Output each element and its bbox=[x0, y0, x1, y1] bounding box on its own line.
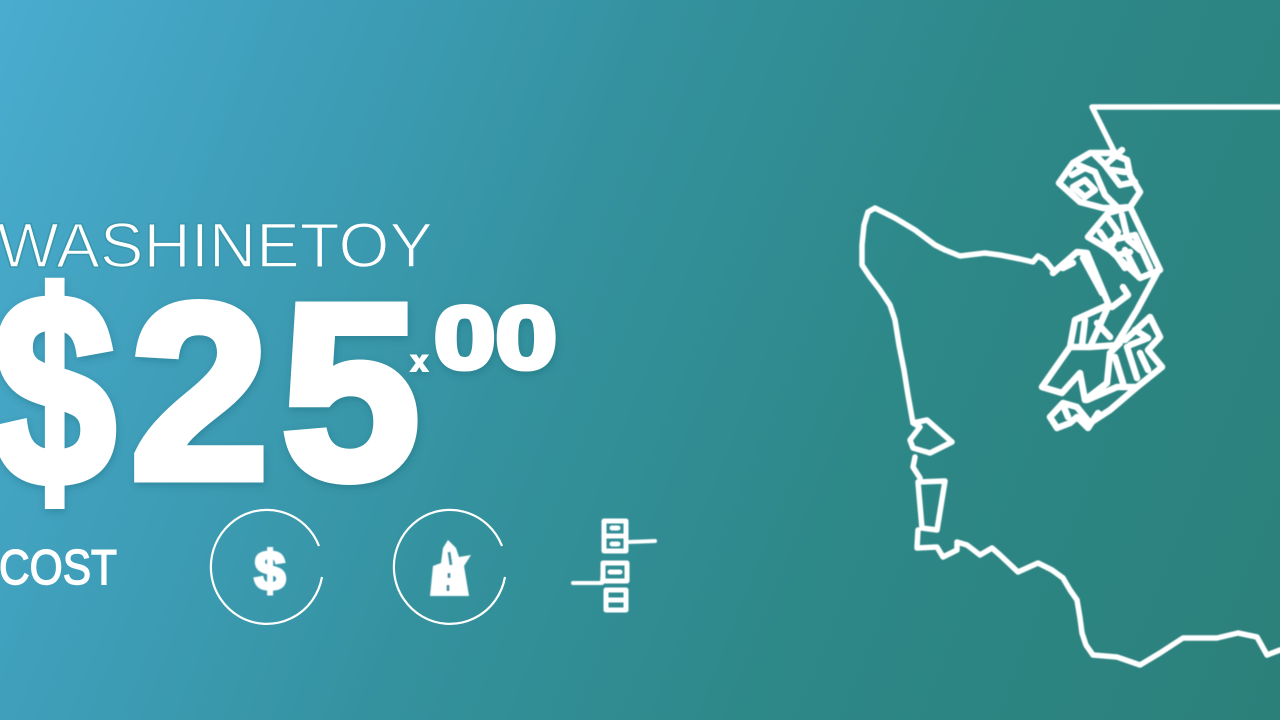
big price figure bbox=[0, 239, 557, 542]
Pacific coast and southern border bbox=[862, 208, 1280, 665]
circle ring bbox=[211, 510, 322, 624]
top glyph bbox=[604, 521, 626, 551]
middle glyph bbox=[603, 563, 627, 581]
Puget Sound: inlet arm bbox=[1053, 252, 1157, 343]
Puget Sound: left lobe bbox=[1070, 305, 1118, 347]
right tick bbox=[628, 541, 655, 542]
label: cost: COST bbox=[0, 541, 117, 595]
bottom glyph bbox=[606, 590, 626, 610]
map: Washington state outline bbox=[862, 107, 1280, 665]
icon: padlock in circle bbox=[394, 510, 505, 624]
padlock bbox=[430, 540, 471, 596]
heading: state name: WASHINETOY bbox=[0, 211, 433, 281]
northern border bbox=[1092, 107, 1280, 155]
icon: dollar in circle bbox=[211, 510, 322, 624]
digit two: 2 bbox=[130, 252, 269, 531]
small multiplication mark: x bbox=[411, 345, 428, 378]
Puget Sound: central lattice bbox=[1088, 207, 1160, 278]
Puget Sound: southern basin bbox=[1042, 317, 1162, 428]
icon: garbled vertical glyphs bbox=[573, 521, 655, 610]
cents: 00 bbox=[434, 288, 557, 387]
circle ring bbox=[394, 510, 505, 624]
dollar glyph: $ bbox=[254, 539, 286, 602]
left tick bbox=[573, 566, 603, 583]
digit five: 5 bbox=[281, 252, 420, 531]
Puget Sound: northern islands bbox=[1059, 150, 1140, 208]
